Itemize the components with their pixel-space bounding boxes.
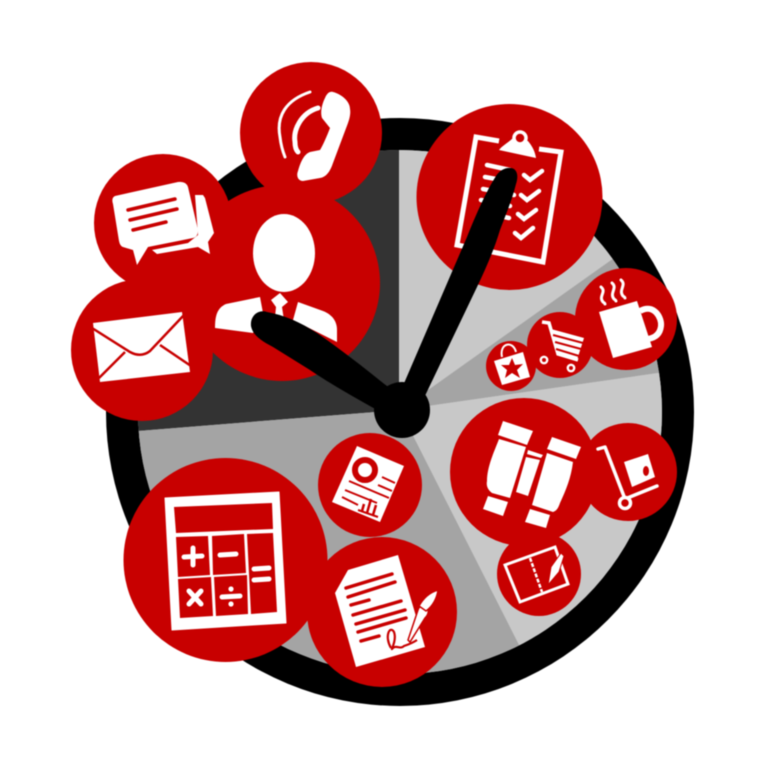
clock hand: hour bbox=[251, 311, 395, 418]
icon group: phone bbox=[240, 62, 382, 204]
icon group: notebook and pen bbox=[497, 532, 581, 616]
icon group: hand trolley bbox=[579, 423, 677, 521]
icon group: signed contract bbox=[307, 537, 457, 687]
icon group: calculator bbox=[124, 458, 328, 662]
clock infographic bbox=[70, 61, 695, 707]
wedge: grey break bbox=[426, 259, 659, 406]
wedge: dark communication bbox=[138, 149, 400, 432]
wedge: light planning bbox=[398, 150, 612, 383]
icon group: report document bbox=[318, 433, 422, 537]
icon group: clipboard checklist bbox=[416, 104, 602, 290]
icon group: shopping cart bbox=[527, 312, 593, 378]
icon group: shopping bag bbox=[486, 341, 536, 391]
icon group: chat bubbles bbox=[94, 154, 232, 292]
icon group: person bbox=[175, 185, 380, 381]
clock rim bbox=[106, 118, 694, 706]
wedge: light logistics bbox=[520, 373, 662, 646]
icon group: envelope bbox=[71, 279, 213, 421]
clock hand: minute bbox=[402, 168, 517, 400]
clock face wedges bbox=[138, 149, 663, 674]
clock hub bbox=[374, 382, 430, 438]
wedge: grey admin bbox=[139, 412, 519, 672]
icon group: binoculars bbox=[450, 398, 598, 546]
icon group: coffee mug bbox=[575, 268, 677, 370]
